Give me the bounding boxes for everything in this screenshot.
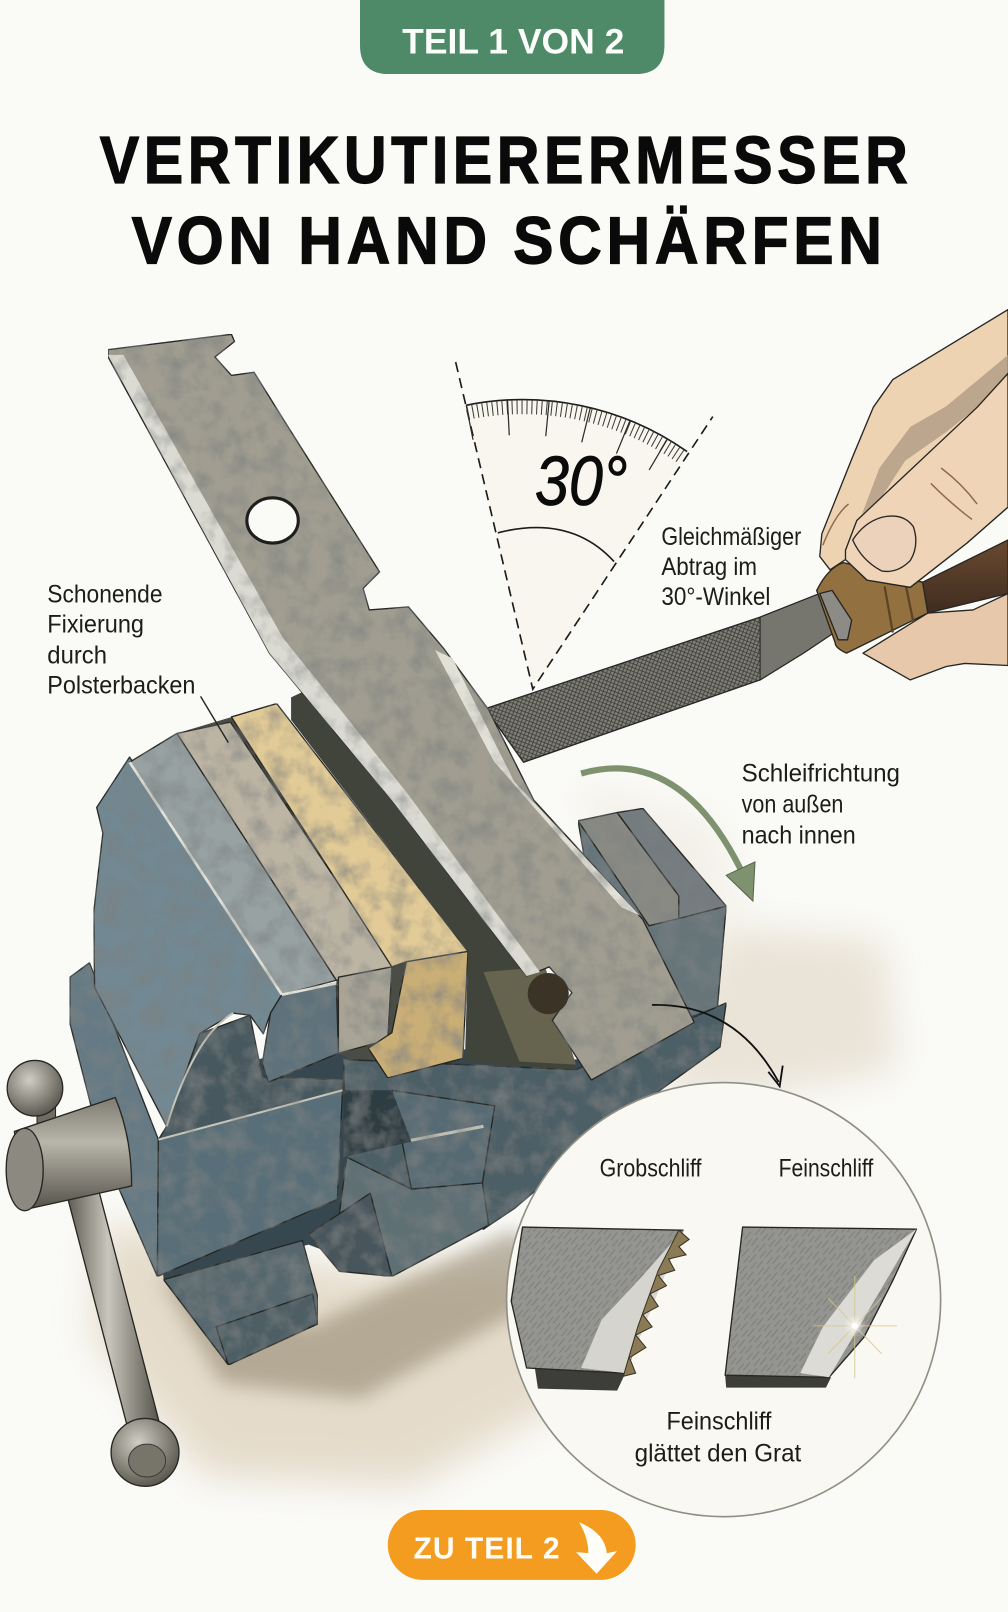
- title: VERTIKUTIERERMESSER: [100, 123, 912, 198]
- label: Schleifrichtung von außen nach innen: Schleifrichtung: [742, 761, 900, 788]
- inset labels: [600, 1156, 873, 1468]
- vise dark underlay: [154, 704, 726, 1280]
- soft jaw pad yellow: [231, 704, 468, 1078]
- vise rear jaw: [578, 808, 726, 1049]
- shading folds and thumb: [823, 355, 1008, 587]
- label: Schonende Fixierung durch Polsterbacken: Fixierung: [47, 612, 144, 639]
- vise central dark body: [309, 1003, 726, 1276]
- vise upper jaw: [94, 733, 338, 1126]
- soft jaw pad light: [177, 722, 394, 1053]
- label: Schleifrichtung von außen nach innen: nach innen: [742, 822, 856, 849]
- label: Gleichmäßiger Abtrag im 30°-Winkel: Gleichmäßiger: [661, 524, 801, 551]
- button: Zu Teil 2: [388, 1510, 636, 1580]
- inset labels: Feinschliff: [779, 1156, 873, 1183]
- label: Schonende Fixierung durch Polsterbacken: Schonende: [47, 582, 163, 609]
- file handle: [817, 540, 1008, 653]
- inset labels: Grobschliff: [600, 1156, 702, 1183]
- label: Schleifrichtung von außen nach innen: von außen: [742, 792, 843, 819]
- title: [100, 123, 912, 278]
- sparkle: [814, 1275, 897, 1378]
- handle bottom ball: [111, 1418, 179, 1486]
- fine edge blade: [725, 1227, 916, 1388]
- label: Schonende Fixierung durch Polsterbacken: Polsterbacken: [47, 672, 195, 699]
- label: Schleifrichtung von außen nach innen: [742, 761, 900, 849]
- vise main block: [70, 963, 344, 1276]
- blade: [108, 334, 694, 1080]
- ground wash shadow: [93, 782, 897, 1486]
- file: [485, 593, 840, 762]
- hand lower fingers: [863, 593, 1008, 680]
- label: Gleichmäßiger Abtrag im 30°-Winkel: Abtrag im: [661, 554, 757, 581]
- badge: Teil 1 von 2: [360, 0, 664, 74]
- label: Schonende Fixierung durch Polsterbacken: durch: [47, 642, 107, 669]
- inset labels: Feinschliff: [667, 1409, 772, 1436]
- thumb nail: [853, 516, 916, 571]
- blade hole: [247, 498, 298, 543]
- rough edge blade: [511, 1227, 689, 1391]
- label: Gleichmäßiger Abtrag im 30°-Winkel: 30°-Winkel: [661, 584, 770, 611]
- badge: Teil 1 von 2: TEIL 1 VON 2: [402, 22, 624, 61]
- icon: curved down arrow: [576, 1522, 617, 1574]
- dark gap behind blade: [291, 689, 576, 1070]
- illustration: bench vise: [70, 689, 726, 1365]
- vise handle: [6, 1060, 179, 1486]
- arrow: blade edge to detail circle: [652, 1005, 783, 1086]
- blade notch: [528, 973, 569, 1014]
- label: Gleichmäßiger Abtrag im 30°-Winkel: [661, 524, 801, 611]
- handle cylinder: [6, 1098, 132, 1211]
- hand holding the file: [817, 310, 1008, 680]
- arrow: grinding direction: [581, 768, 755, 901]
- title: VON HAND SCHÄRFEN: [132, 203, 887, 278]
- hand skin: [820, 310, 1008, 587]
- handle top ball: [7, 1060, 63, 1131]
- button: Zu Teil 2: ZU TEIL 2: [413, 1530, 561, 1565]
- protractor 30 degrees: [456, 362, 713, 689]
- inset labels: glättet den Grat: [635, 1441, 801, 1468]
- protractor 30 degrees: 30°: [535, 442, 627, 520]
- label: Schonende Fixierung durch Polsterbacken: [47, 582, 228, 743]
- handle rod: [64, 1175, 163, 1443]
- vise foot: [164, 1240, 318, 1365]
- inset: detail circle: [507, 1083, 941, 1517]
